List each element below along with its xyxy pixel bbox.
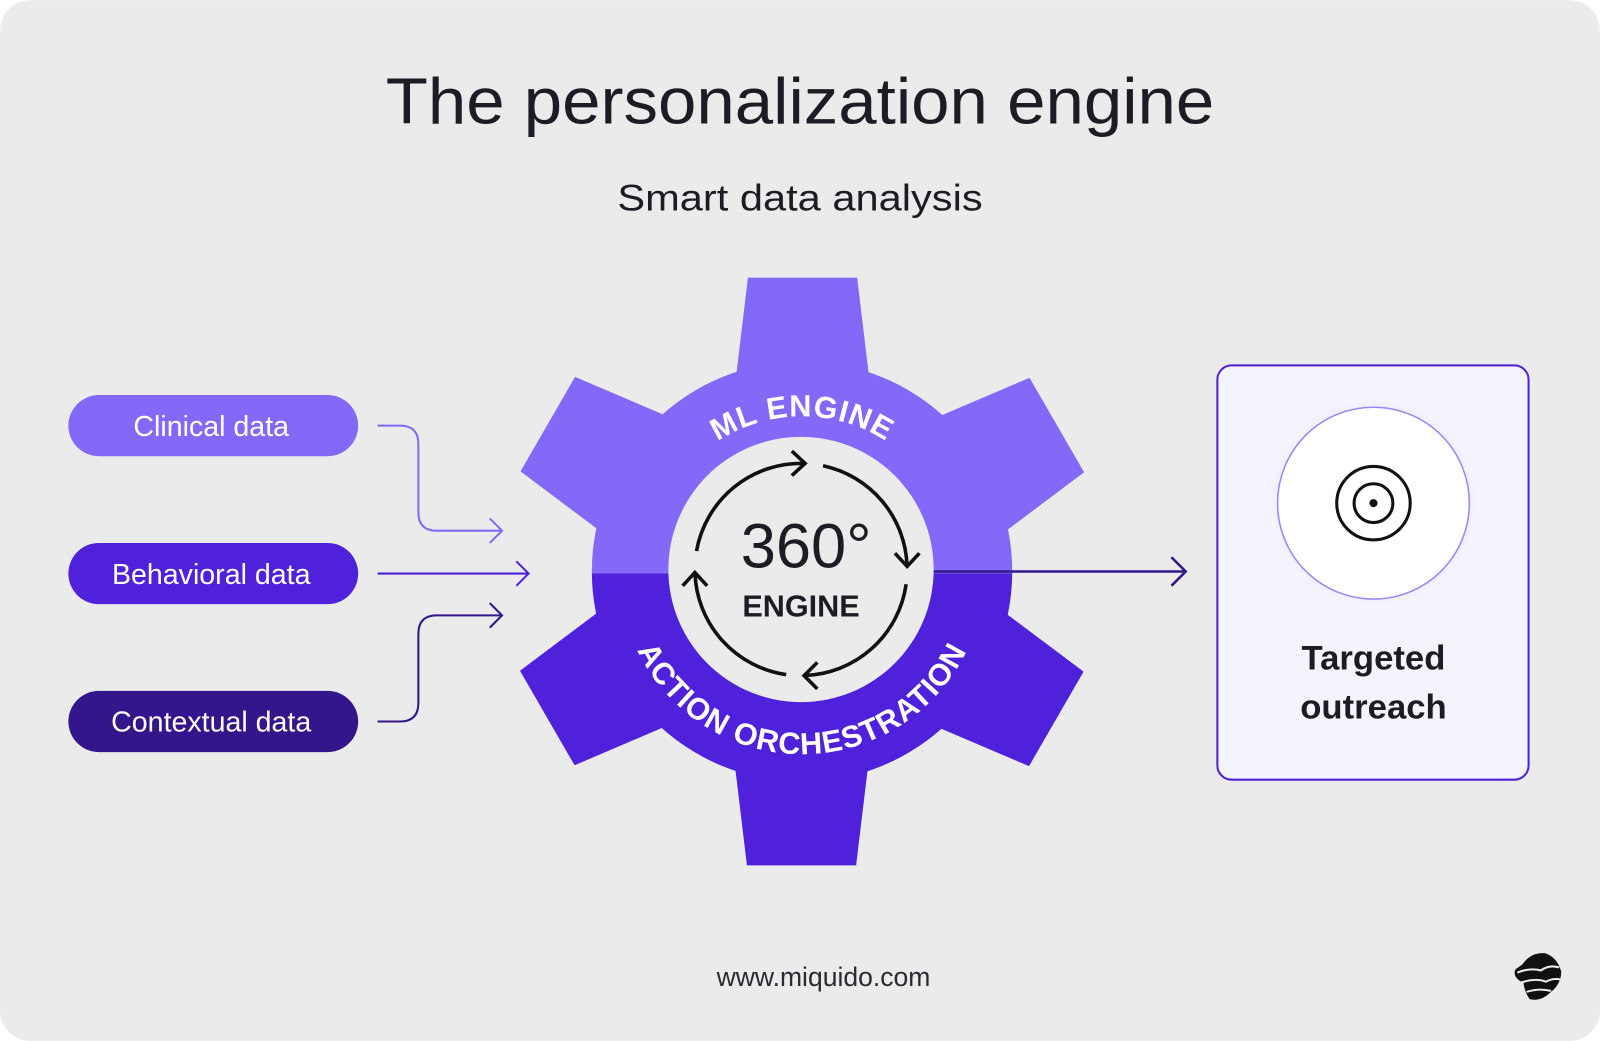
arrow: clinical connector [378, 426, 502, 543]
arrow: to outreach [934, 557, 1186, 586]
label: 360 engine: 360° [741, 511, 872, 581]
pill: contextual data [68, 691, 358, 752]
label: action orchestration: ACTION ORCHESTRATION [637, 642, 966, 754]
pill: contextual data: Contextual data [111, 707, 311, 739]
title: The personalization engine [386, 65, 1214, 138]
arrow: contextual connector [378, 603, 502, 722]
arrow: behavioral connector [378, 561, 529, 586]
label: ML engine: ML ENGINE [709, 395, 894, 440]
icon: target [1278, 407, 1469, 599]
panel: targeted outreach: outreach [1300, 688, 1447, 726]
footer url: www.miquido.com [716, 962, 930, 992]
icon: logo [1515, 953, 1561, 1000]
pill: behavioral data [68, 543, 358, 604]
pill: clinical data [68, 395, 358, 456]
panel: targeted outreach [1217, 365, 1529, 780]
gear [520, 278, 1084, 866]
pill: behavioral data: Behavioral data [112, 559, 311, 591]
label: 360 engine: ENGINE [742, 589, 860, 623]
subtitle: Smart data analysis [617, 177, 983, 218]
text: targeted outreach: Targeted [1302, 639, 1445, 677]
label: 360 engine [741, 511, 872, 623]
icon: cycle arrows [683, 451, 919, 689]
pill: clinical data: Clinical data [133, 411, 289, 443]
